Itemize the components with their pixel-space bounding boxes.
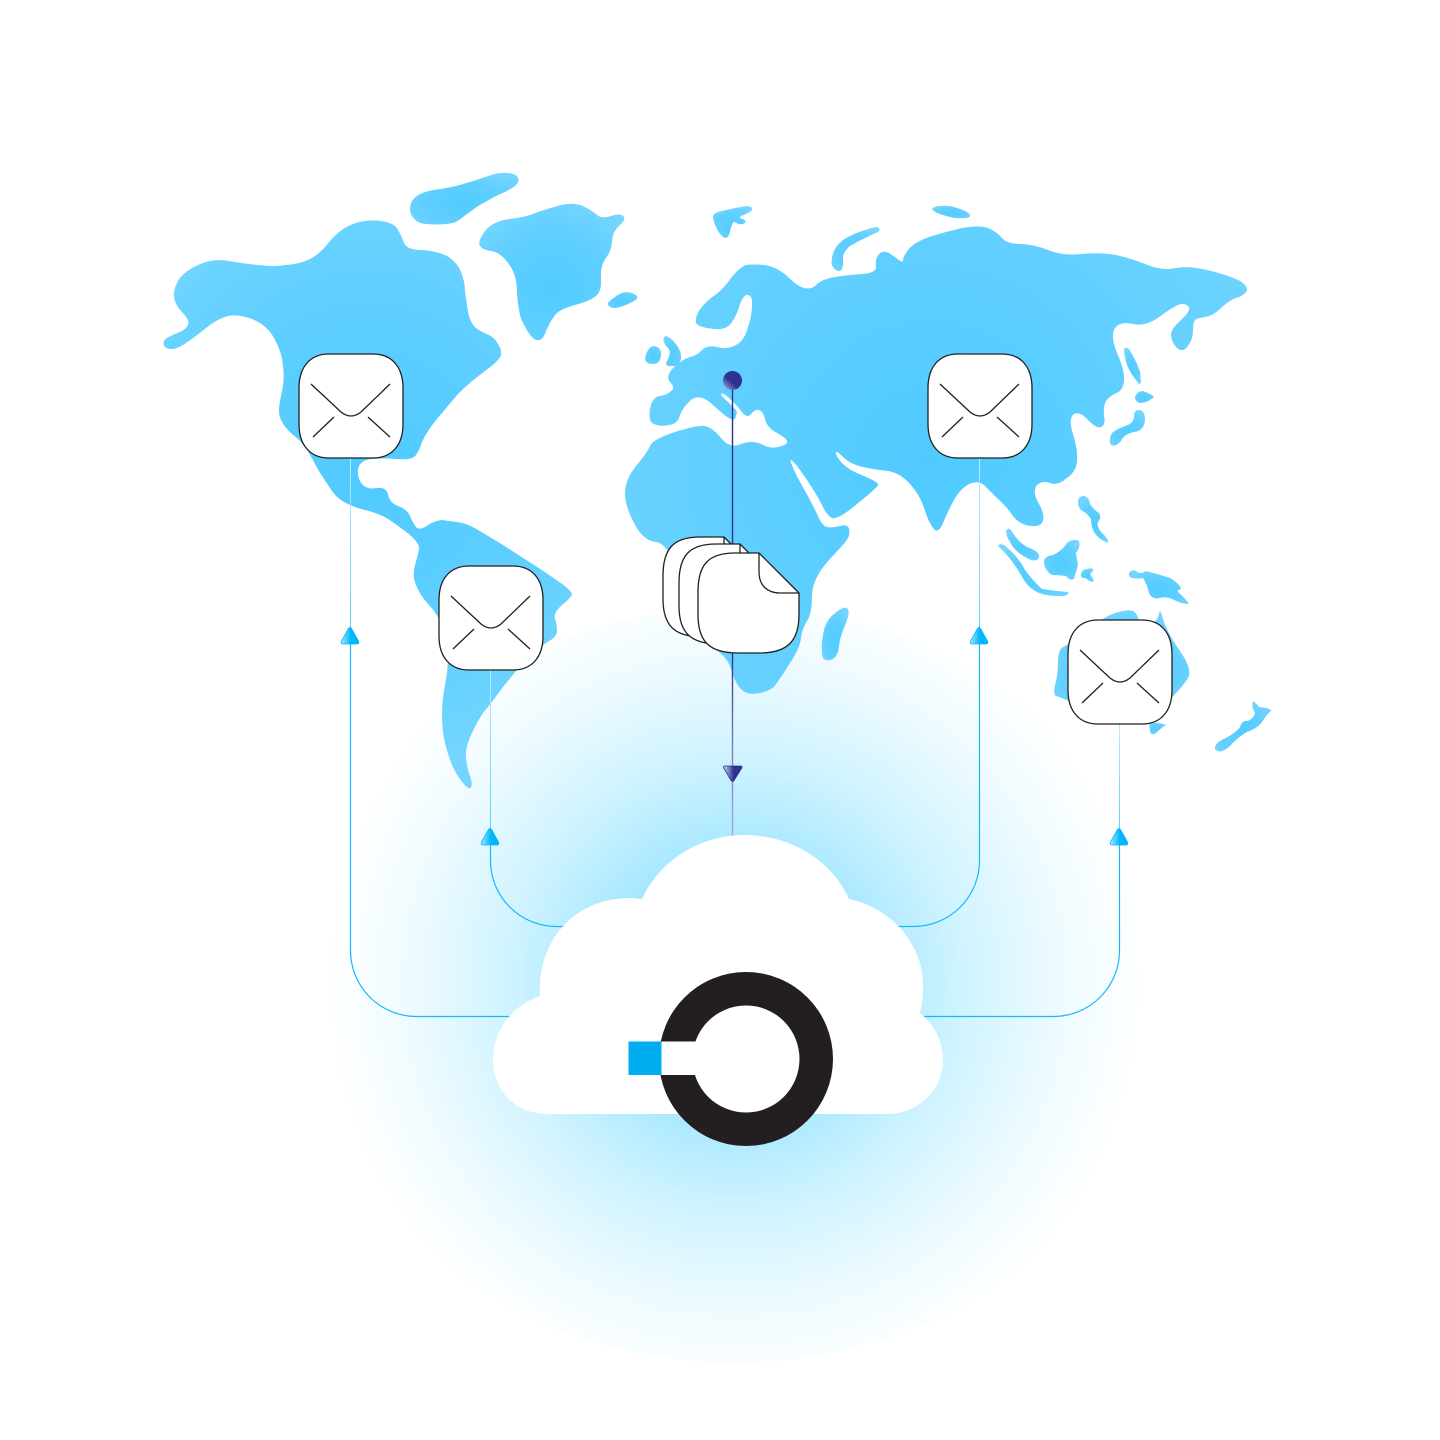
island: New Zealand: [1215, 701, 1271, 751]
island: Honshu: [1110, 410, 1145, 446]
continent: Australia: [1054, 610, 1189, 715]
logo ring: [659, 972, 833, 1146]
island: Svalbard: [713, 206, 752, 238]
island: Ireland: [645, 346, 661, 364]
island: Novaya Zemlya: [832, 227, 880, 271]
island: Iceland: [608, 292, 638, 308]
island: Great Britain: [663, 336, 681, 366]
island: Tasmania: [1149, 723, 1166, 734]
island: Sulawesi: [1081, 568, 1094, 582]
arrow: inner left up: [481, 828, 499, 845]
front document: [698, 553, 799, 653]
island: Greenland: [479, 204, 624, 340]
small islands: [608, 206, 1271, 751]
island: Hokkaido: [1135, 391, 1154, 403]
outgoing line: inner left: [490, 670, 570, 926]
island: Severnaya Zemlya: [932, 206, 970, 218]
arrow: centre down: [724, 766, 742, 782]
icon: origin dot: [723, 371, 742, 390]
arrow: inner right up: [970, 628, 988, 644]
icon: envelope Asia: [928, 354, 1032, 458]
outgoing line: far right: [920, 724, 1120, 1016]
logo notch: [658, 1042, 696, 1075]
logo blue square: [628, 1042, 662, 1075]
back document: [663, 537, 764, 637]
icon: envelope Australia: [1068, 620, 1172, 724]
incoming line: centre: [732, 385, 733, 837]
continent: the Americas: [164, 220, 572, 788]
outgoing line: far left: [350, 458, 520, 1016]
icon: document stack: [663, 537, 799, 653]
island: Philippines: [1078, 496, 1108, 543]
arrow: far right up: [1110, 828, 1128, 845]
outgoing line: inner right: [895, 458, 980, 926]
island: Sakhalin: [1124, 348, 1141, 384]
island: Baffin: [410, 173, 519, 224]
continent: Eurasia and Africa: [625, 226, 1247, 694]
island: Java chain: [998, 544, 1068, 596]
icon: envelope North America: [299, 354, 403, 458]
arrow: far left up: [341, 628, 359, 644]
logo: [628, 972, 833, 1146]
island: Borneo: [1044, 540, 1080, 580]
icon: envelope South America: [439, 566, 543, 670]
island: New Guinea: [1129, 570, 1189, 604]
island: Madagascar: [822, 608, 849, 660]
world map: [164, 173, 1271, 788]
cloud glow: [305, 607, 1165, 1363]
island: Sumatra: [1006, 529, 1039, 560]
middle document: [679, 544, 780, 644]
icon: cloud: [493, 835, 943, 1114]
